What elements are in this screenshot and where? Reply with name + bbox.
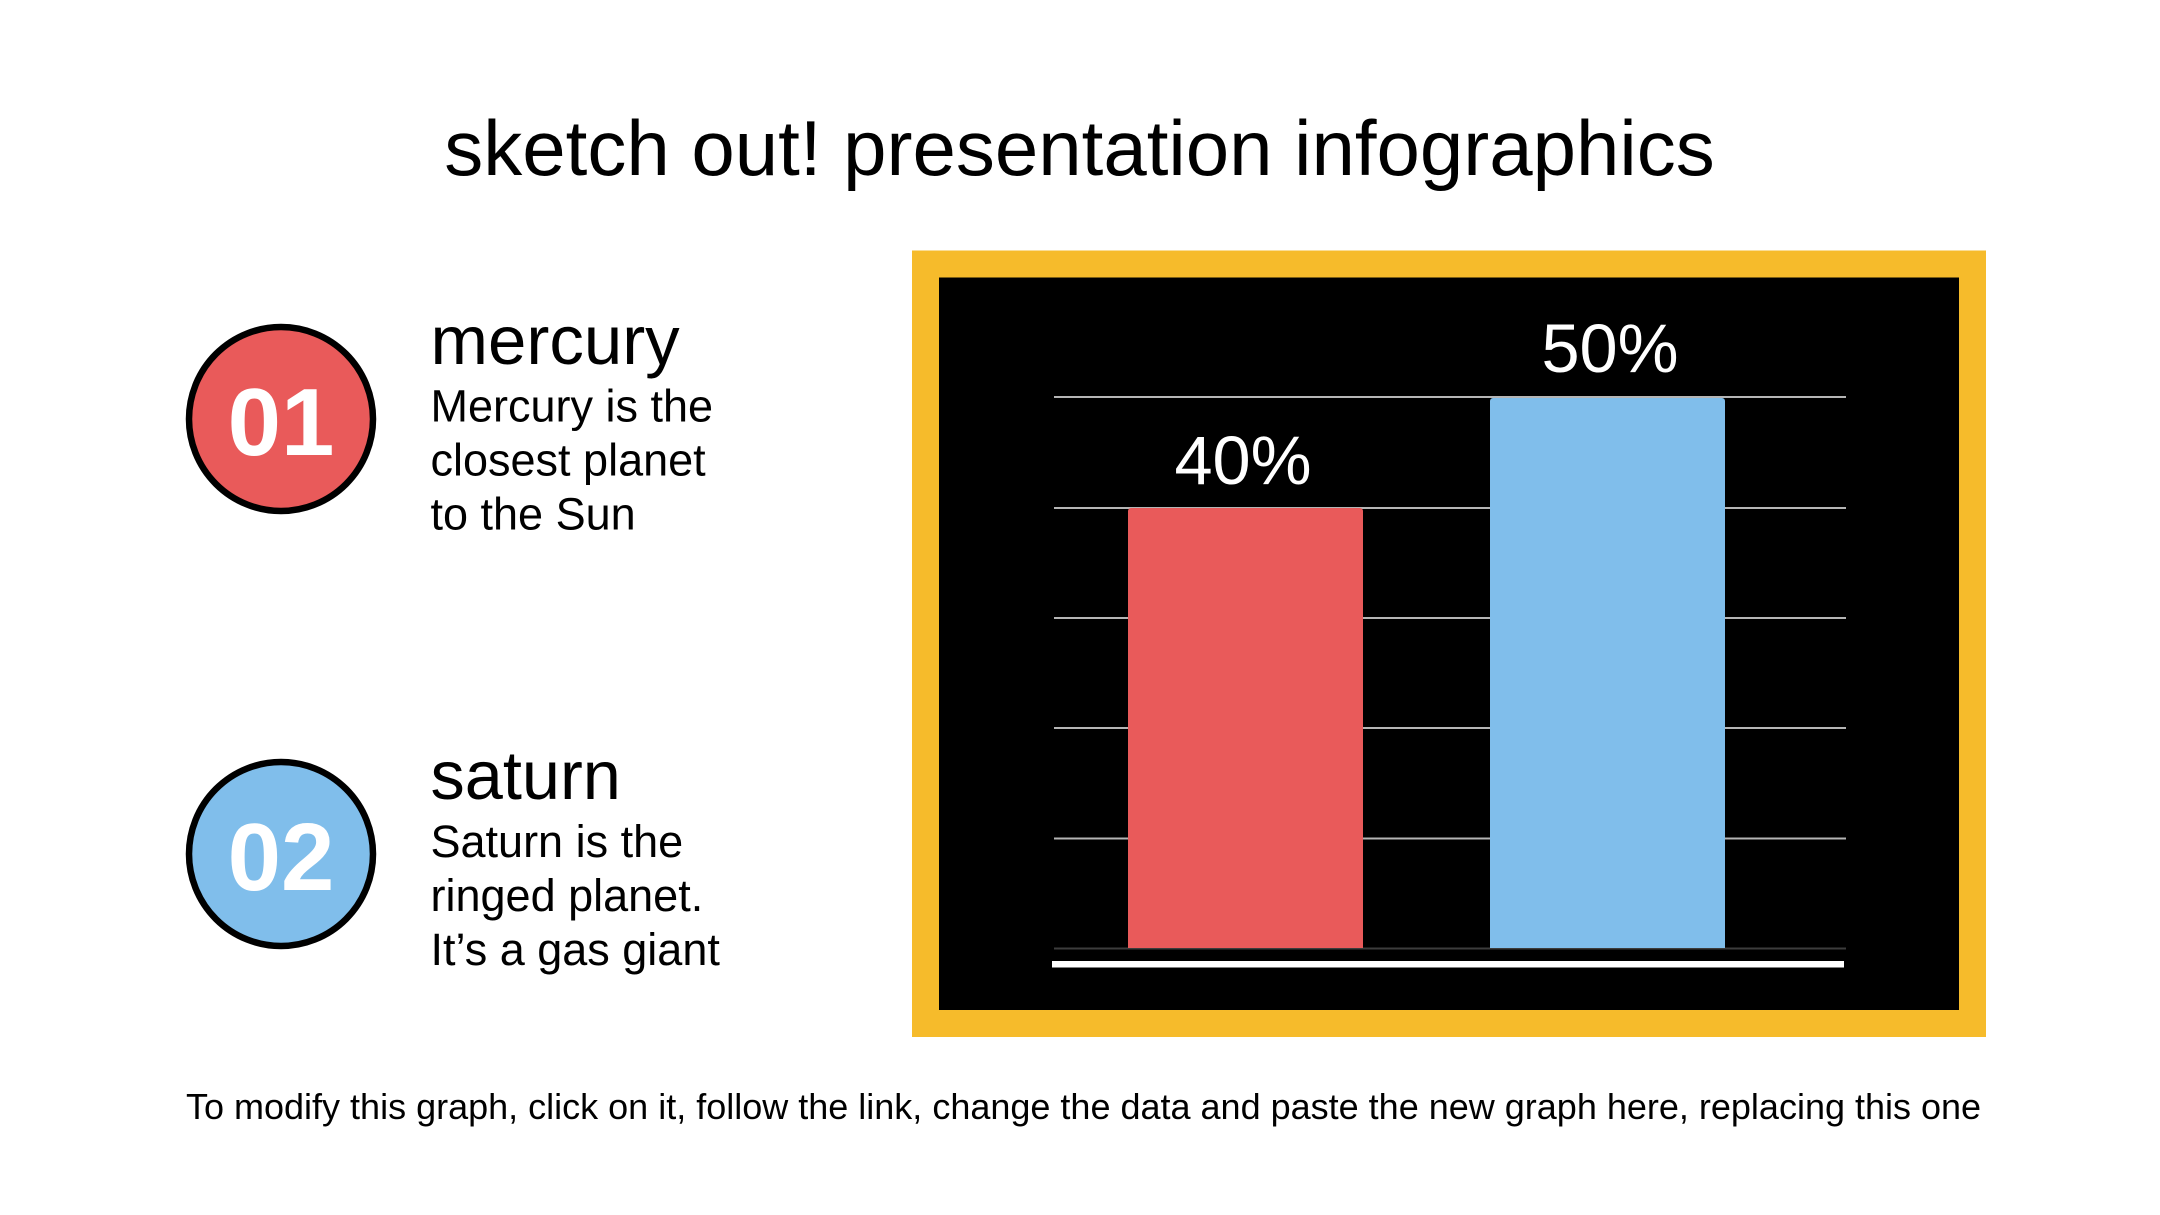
text block: mercury description: to the Sun	[430, 488, 636, 540]
bar: saturn 50%	[1490, 398, 1725, 948]
axis line	[1052, 961, 1844, 968]
label: 40%: 40%	[1174, 422, 1312, 499]
panel: saturn	[189, 737, 720, 975]
panel: mercury	[189, 302, 713, 540]
icon: saturn number badge: 02	[228, 804, 334, 911]
label: 50%: 50%	[1541, 310, 1679, 387]
title: sketch out! presentation infographics	[444, 104, 1715, 192]
text block: mercury description: closest planet	[430, 434, 706, 486]
text block: mercury description: Mercury is the	[430, 380, 713, 432]
bar chart	[1052, 310, 1846, 968]
bar: mercury 40%	[1128, 508, 1363, 948]
icon: mercury number badge	[189, 327, 373, 511]
text block: saturn description: Saturn is the	[430, 816, 683, 867]
text block: saturn description: It’s a gas giant	[430, 924, 720, 975]
footer note: To modify this graph, click on it, follow the link, change the data and paste the new graph here, replacing this one	[186, 1086, 1981, 1127]
icon: saturn number badge	[189, 762, 373, 946]
heading: mercury: mercury	[430, 302, 680, 379]
icon: mercury number badge: 01	[228, 369, 334, 476]
heading: saturn: saturn	[430, 737, 621, 814]
text block: saturn description: ringed planet.	[430, 870, 703, 921]
panel: bar chart frame	[912, 250, 1986, 1037]
